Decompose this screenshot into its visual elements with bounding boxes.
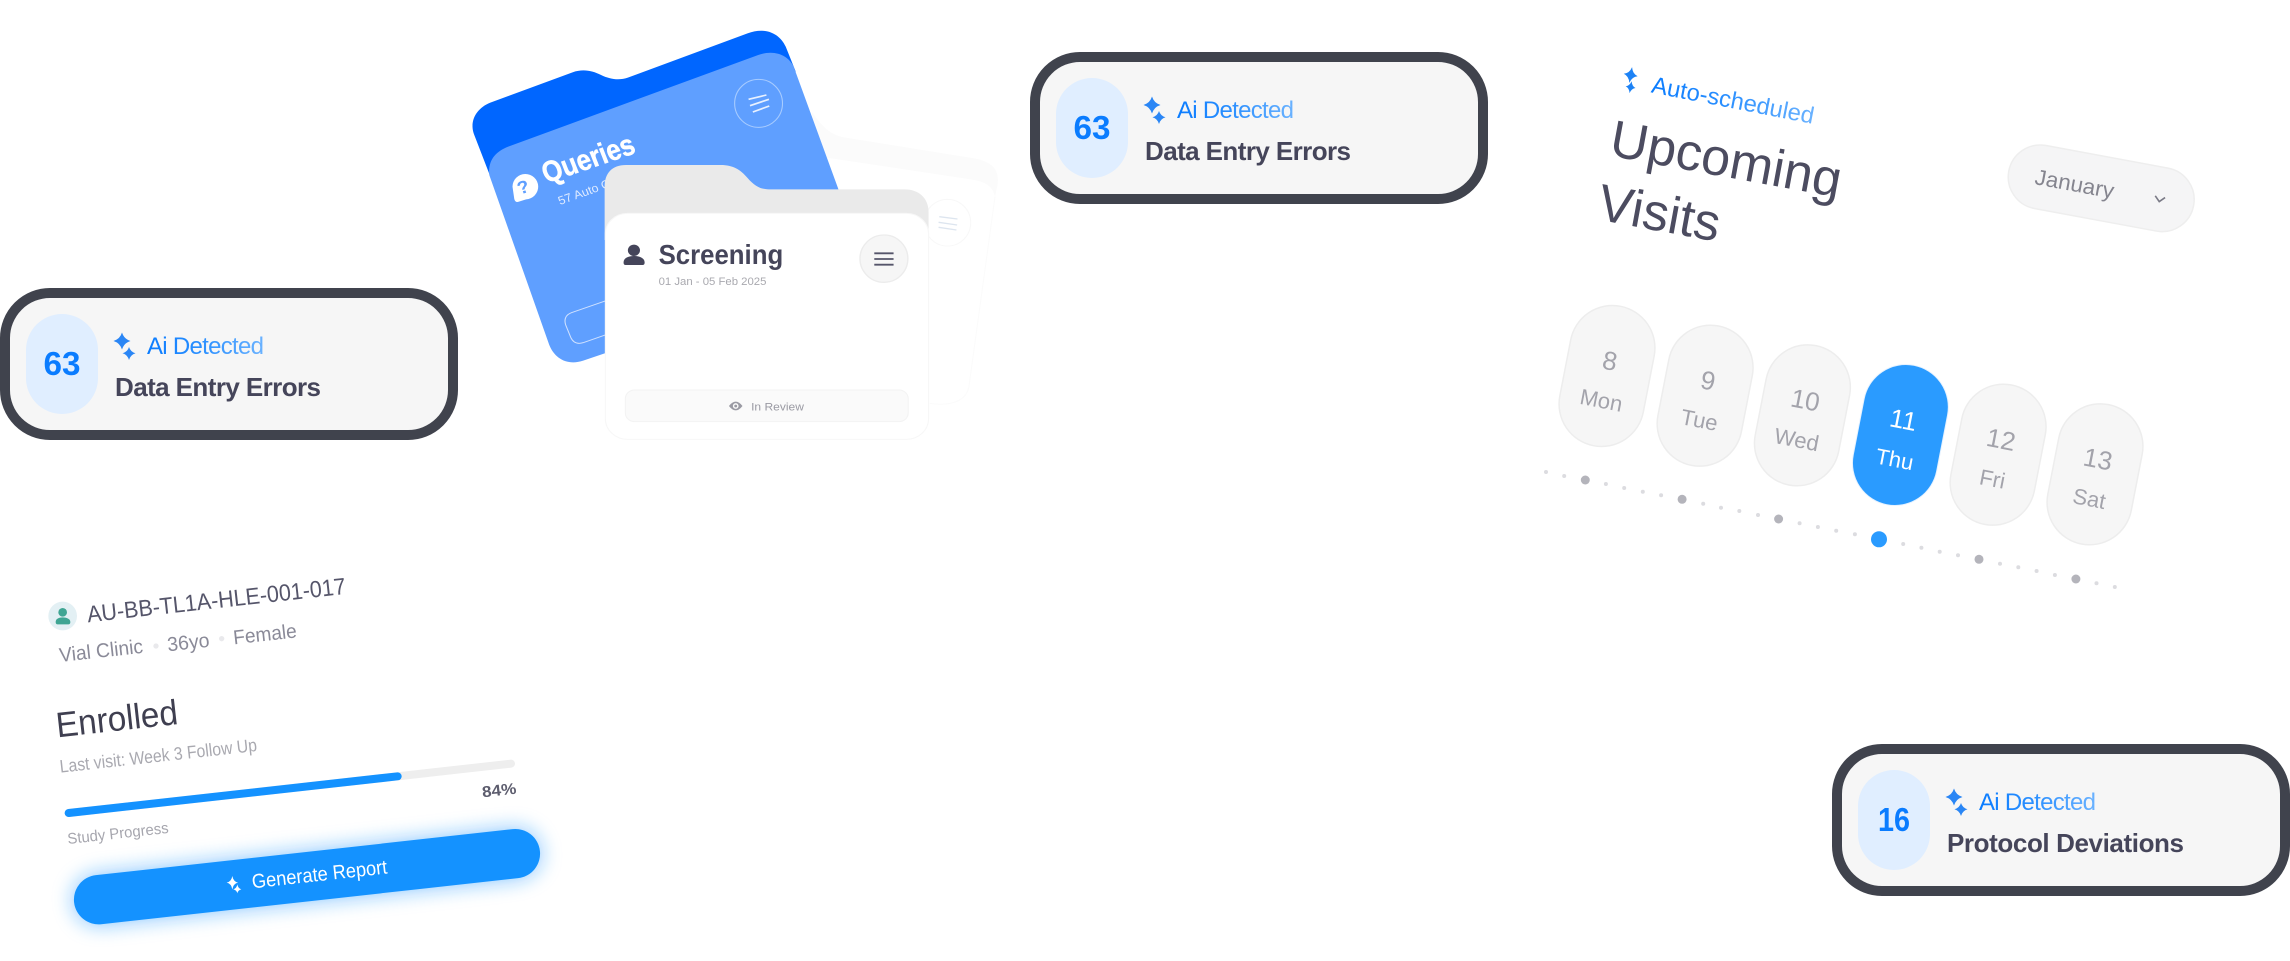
upcoming visits header (1594, 66, 2199, 253)
icon: question bubble: ? (514, 176, 532, 198)
Upcoming Visits heading: Upcoming (1606, 110, 1846, 209)
patient ID: AU-BB-TL1A-HLE-001-017 (86, 573, 347, 627)
status: Enrolled: Enrolled (54, 693, 180, 745)
icon: question bubble (512, 174, 538, 202)
last visit: Last visit: Week 3 Follow Up (59, 735, 258, 777)
day: 10 Wed: 10 (1788, 383, 1822, 418)
icon: person (624, 245, 645, 265)
study progress label: Study Progress (67, 820, 170, 848)
Screening title: Screening (659, 240, 783, 271)
Auto-scheduled label: Auto-scheduled (1650, 72, 1816, 129)
patient details: Vial Clinic (58, 636, 144, 667)
day: 8 Mon (1552, 298, 1662, 454)
badge: Data Entry Errors (left): Data Entry Errors (115, 372, 321, 402)
badge: Protocol Deviations (bottom right): Protocol Deviations (1947, 828, 2184, 858)
generate report button: Generate Report (251, 856, 389, 893)
folder: Screening (605, 165, 929, 439)
day: 8 Mon: 8 (1600, 345, 1620, 377)
Upcoming Visits heading: Visits (1594, 174, 1725, 253)
Queries outlined button (565, 299, 610, 343)
badge: Data Entry Errors (left): Ai Detected (147, 333, 264, 360)
Queries subtitle: 57 Auto C (556, 177, 613, 208)
January dropdown (2003, 140, 2199, 237)
day: 9 Tue: Tue (1679, 404, 1720, 436)
day: 12 Fri: 12 (1984, 422, 2018, 457)
calendar strip (1544, 298, 2150, 589)
Screening dates: 01 Jan - 05 Feb 2025 (659, 276, 766, 288)
day: 8 Mon: Mon (1578, 384, 1625, 417)
day: 13 Sat: 13 (2081, 442, 2115, 477)
patient details: 36yo (166, 630, 211, 656)
Screening menu button (860, 235, 908, 282)
day: 10 Wed (1747, 337, 1858, 493)
patient details (58, 620, 298, 667)
Queries menu button (735, 79, 782, 127)
badge: Protocol Deviations (bottom right) (1837, 749, 2285, 891)
Upcoming Visits heading (1594, 110, 1846, 253)
day: 12 Fri (1943, 377, 2053, 533)
day: 11 Thu active: Thu (1874, 443, 1916, 475)
badge: Data Entry Errors (left) (5, 293, 453, 435)
ghost folder behind (812, 112, 998, 404)
badge: Data Entry Errors (top centre): 63 (1074, 109, 1110, 146)
icon: sparkles (1621, 66, 1639, 94)
badge: Data Entry Errors (left): 63 (44, 345, 80, 382)
In Review status bar (625, 390, 908, 422)
day: 9 Tue (1650, 318, 1760, 474)
January dropdown: January (2033, 164, 2116, 203)
day: 13 Sat (2040, 396, 2150, 552)
progress bar (69, 764, 511, 813)
folder: Queries (473, 31, 839, 362)
timeline dots (1544, 470, 2117, 589)
badge: Protocol Deviations (bottom right): Ai Detected (1979, 789, 2096, 816)
badge: Data Entry Errors (top centre): Data Entry Errors (1145, 136, 1351, 166)
day: 11 Thu active (1845, 357, 1956, 513)
day: 13 Sat: Sat (2071, 483, 2108, 514)
day: 9 Tue: 9 (1698, 364, 1718, 397)
badge: Data Entry Errors (top centre) (1035, 57, 1483, 199)
day: 11 Thu active: 11 (1887, 402, 1919, 437)
Queries title: Queries (537, 128, 640, 190)
day: 10 Wed: Wed (1772, 423, 1821, 456)
patient card (48, 573, 543, 927)
badge: Protocol Deviations (bottom right): 16 (1878, 801, 1910, 838)
folder stack (473, 31, 998, 439)
patient details: Female (232, 620, 298, 649)
generate report button (71, 826, 543, 927)
day: 12 Fri: Fri (1977, 464, 2007, 494)
progress value: 84% (481, 781, 517, 801)
In Review status bar: In Review (751, 401, 804, 414)
badge: Data Entry Errors (top centre): Ai Detected (1177, 97, 1294, 124)
icon: patient avatar (48, 602, 77, 630)
